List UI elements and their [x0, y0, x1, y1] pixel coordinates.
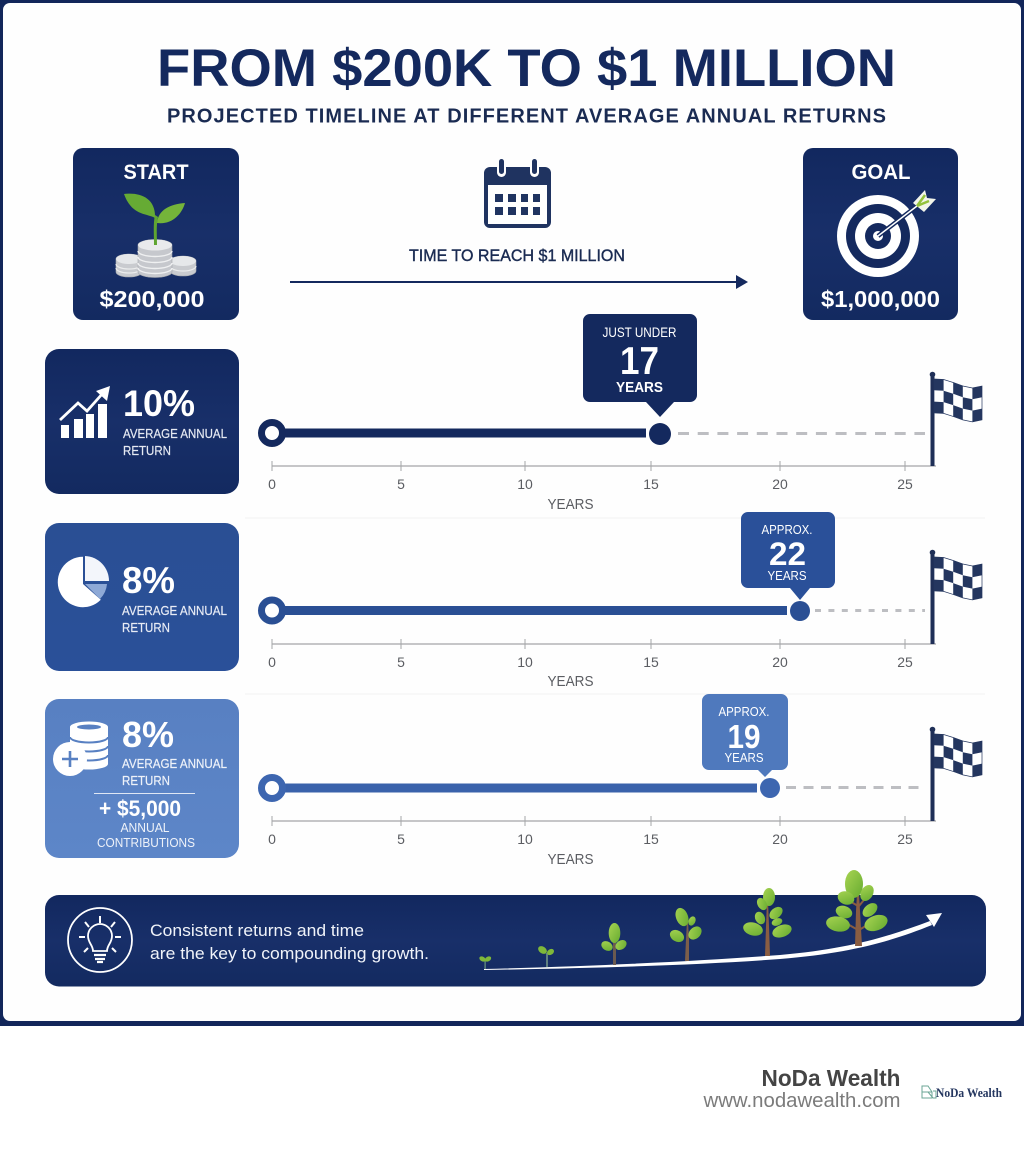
icon: sapling 3	[600, 923, 628, 965]
icon: rising bar chart	[60, 386, 110, 438]
axis: years: YEARS	[548, 496, 594, 513]
icon: target with arrow	[837, 190, 936, 277]
panel: start	[73, 148, 239, 320]
callout: approx 19 years	[702, 694, 788, 777]
row: 10 percent	[45, 314, 982, 513]
callout: approx 19 years: APPROX.	[718, 704, 770, 719]
panel: 8 percent return	[45, 523, 239, 671]
callout: approx 22 years: 22	[769, 536, 806, 572]
goal heading: GOAL	[852, 161, 911, 184]
callout: just under 17 years	[583, 314, 697, 417]
panel: 8 percent plus contributions	[45, 699, 239, 858]
footer: small logo: NoDa Wealth	[936, 1085, 1003, 1100]
icon: checkered flag	[930, 727, 982, 821]
start heading: START	[124, 161, 189, 184]
icon: seedling 2	[537, 944, 555, 967]
contribution amount: + $5,000	[99, 796, 181, 821]
icon: light bulb	[68, 908, 132, 972]
axis: years: 15	[643, 654, 659, 670]
timeline: 8 percent	[262, 600, 925, 621]
callout: approx 22 years: YEARS	[768, 568, 807, 583]
axis: years: 20	[772, 831, 788, 847]
axis: years: 0	[268, 831, 276, 847]
title: FROM $200K TO $1 MILLION	[157, 39, 896, 98]
footer: company name: NoDa Wealth	[762, 1065, 900, 1091]
row: 8 percent plus contributions	[45, 694, 982, 868]
icon: coin stack with plus	[53, 722, 108, 776]
axis: years: 10	[517, 654, 533, 670]
axis: years: YEARS	[548, 851, 594, 868]
icon: full tree 6	[825, 870, 890, 946]
contribution label: ANNUAL	[120, 820, 170, 835]
timeline: 10 percent	[262, 422, 925, 445]
axis: years: 15	[643, 831, 659, 847]
callout: approx 22 years	[741, 512, 835, 600]
return label: RETURN	[122, 773, 170, 788]
axis: years: 5	[397, 654, 405, 670]
return label: AVERAGE ANNUAL	[122, 756, 227, 771]
return label: RETURN	[122, 620, 170, 635]
timeline: 8 percent plus contributions	[262, 778, 925, 798]
axis: years: 5	[397, 831, 405, 847]
return label: RETURN	[123, 443, 171, 458]
goal amount: $1,000,000	[821, 286, 940, 312]
panel: key takeaway banner	[45, 895, 986, 986]
axis: years: 5	[397, 476, 405, 492]
row: 8 percent	[45, 512, 982, 690]
callout: approx 19 years: YEARS	[724, 750, 764, 765]
callout: just under 17 years: 17	[620, 340, 659, 383]
axis: years: 15	[643, 476, 659, 492]
icon: pie chart	[58, 556, 109, 607]
axis: years: 10	[517, 831, 533, 847]
axis: years	[268, 639, 936, 690]
callout: approx 22 years: APPROX.	[762, 522, 812, 537]
arrow: start to goal	[290, 275, 748, 289]
axis: years	[268, 816, 936, 868]
axis: years: 25	[897, 831, 913, 847]
axis: years	[268, 461, 936, 513]
callout: approx 19 years: 19	[728, 718, 760, 755]
takeaway text: are the key to compounding growth.	[150, 944, 429, 963]
callout: just under 17 years: YEARS	[616, 379, 663, 396]
icon: seedling 1	[478, 955, 492, 969]
icon: checkered flag	[930, 372, 982, 466]
footer: website: www.nodawealth.com	[702, 1090, 900, 1112]
axis: years: 25	[897, 654, 913, 670]
icon: sapling 4	[668, 906, 704, 961]
axis: years: 20	[772, 654, 788, 670]
callout: just under 17 years: JUST UNDER	[602, 325, 677, 340]
return label: AVERAGE ANNUAL	[122, 603, 227, 618]
arrow: growth curve	[484, 913, 942, 970]
growth curve with trees	[478, 870, 942, 970]
axis: years: 0	[268, 476, 276, 492]
axis: years: 20	[772, 476, 788, 492]
return value: 8%	[122, 560, 175, 601]
return label: AVERAGE ANNUAL	[123, 426, 227, 441]
axis: years: 10	[517, 476, 533, 492]
axis: years: 0	[268, 654, 276, 670]
icon: coins with sprout	[116, 194, 196, 278]
return value: 10%	[123, 383, 195, 424]
axis: years: YEARS	[548, 673, 594, 690]
subtitle: PROJECTED TIMELINE AT DIFFERENT AVERAGE ANNUAL RETURNS	[167, 106, 886, 128]
panel: 10 percent return	[45, 349, 239, 494]
return value: 8%	[122, 714, 174, 755]
panel: goal	[803, 148, 958, 320]
takeaway text: Consistent returns and time	[150, 921, 364, 940]
contribution label: CONTRIBUTIONS	[97, 835, 195, 850]
icon: calendar	[484, 157, 551, 228]
icon: checkered flag	[930, 550, 982, 644]
axis: years: 25	[897, 476, 913, 492]
icon: young tree 5	[742, 888, 793, 956]
time label: TIME TO REACH $1 MILLION	[409, 246, 625, 265]
start amount: $200,000	[100, 286, 204, 312]
